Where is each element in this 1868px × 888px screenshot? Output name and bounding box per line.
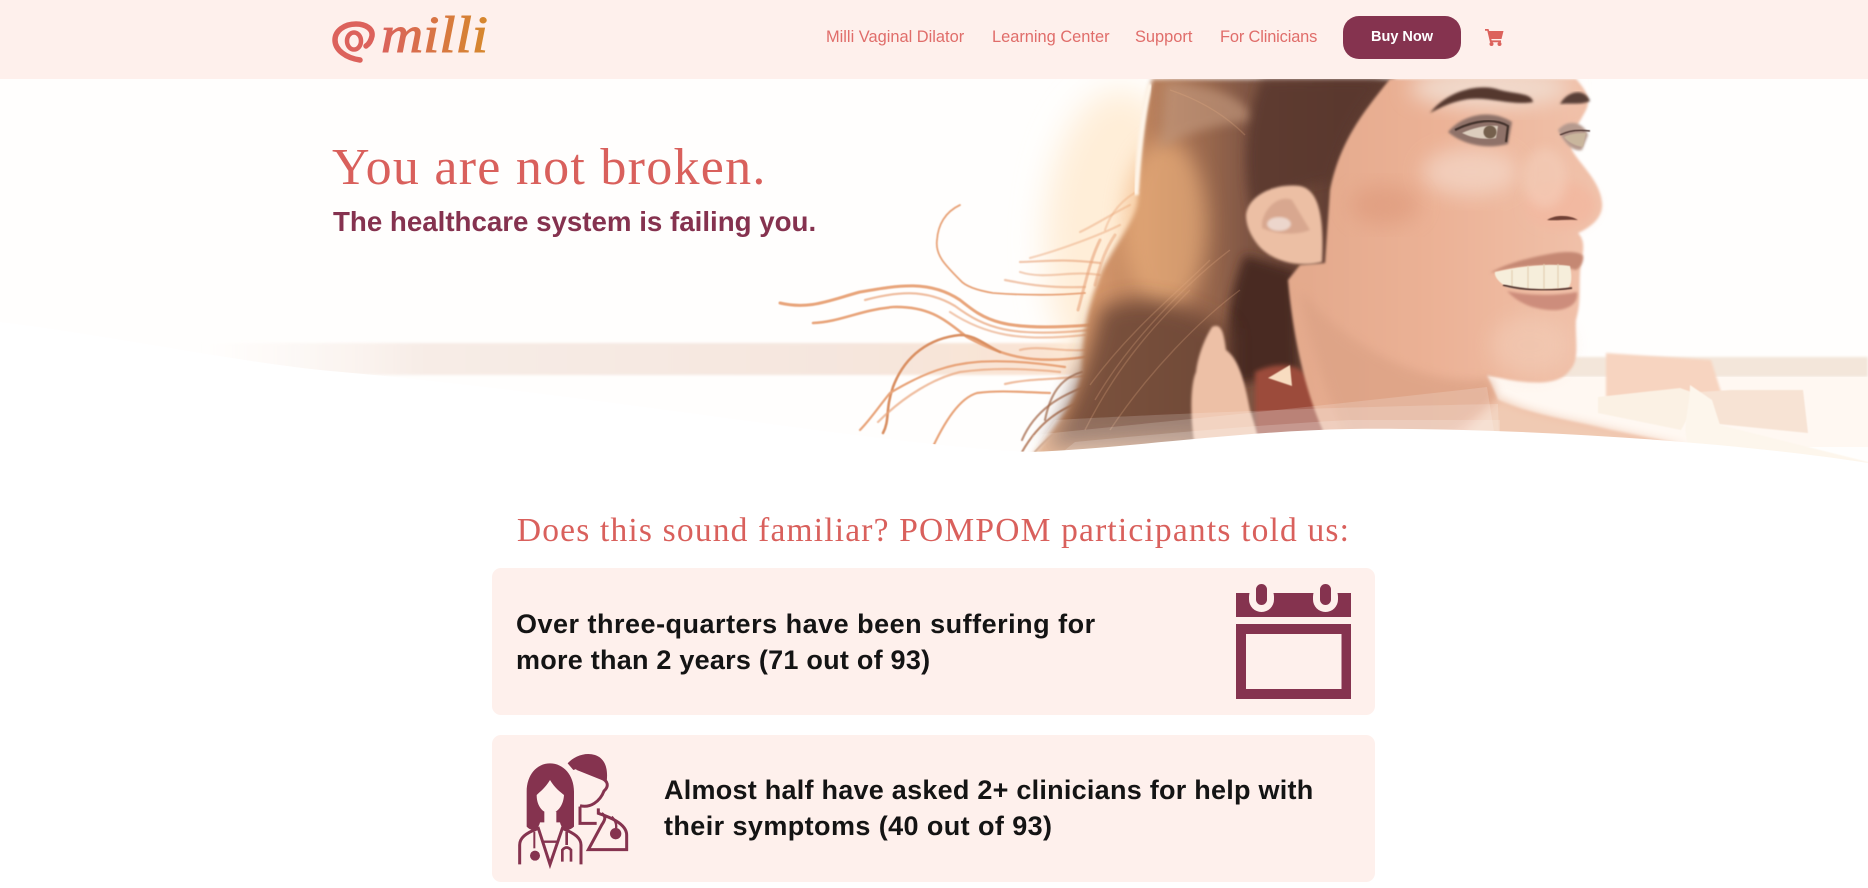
section heading: Does this sound familiar? POMPOM participants told us:: [517, 512, 1350, 549]
icon: cart: [1485, 29, 1504, 46]
card text: [516, 609, 1096, 675]
icon: calendar: [1236, 584, 1351, 699]
hand: [1191, 326, 1260, 447]
hair mass: [1032, 79, 1395, 456]
card: clinicians asked: [492, 735, 1375, 882]
white wave mask: [0, 322, 1868, 888]
translucent wave bands: [1020, 387, 1500, 470]
nav link: Support: [1135, 28, 1192, 46]
red garment behind hand: [1255, 365, 1330, 445]
card text: more than 2 years (71 out of 93): [516, 645, 930, 675]
eye left: [1430, 87, 1533, 146]
nav link: For Clinicians: [1220, 28, 1317, 46]
face, neck and shoulder: [1246, 68, 1700, 448]
card text: Almost half have asked 2+ clinicians for help with: [664, 775, 1313, 805]
card text: their symptoms (40 out of 93): [664, 811, 1052, 841]
buy now button: Buy Now: [1371, 29, 1433, 45]
nav link: Milli Vaginal Dilator: [826, 28, 964, 46]
card text: Over three-quarters have been suffering for: [516, 609, 1096, 639]
flying hair strands: [780, 190, 1140, 453]
ear: [1246, 186, 1322, 264]
eye right: [1558, 92, 1590, 150]
nav link: Learning Center: [992, 28, 1110, 46]
icon: clinicians: [518, 754, 628, 869]
logo: milli: [381, 8, 488, 64]
subheading: The healthcare system is failing you.: [333, 206, 816, 237]
buy now button: [1343, 16, 1461, 59]
scarf bow: [1598, 353, 1868, 470]
card: suffering duration: [492, 568, 1375, 715]
headline: You are not broken.: [332, 139, 767, 196]
card text: [664, 775, 1313, 841]
nav bar: [0, 0, 1868, 79]
logo: [332, 8, 488, 64]
smile: [1490, 252, 1583, 310]
